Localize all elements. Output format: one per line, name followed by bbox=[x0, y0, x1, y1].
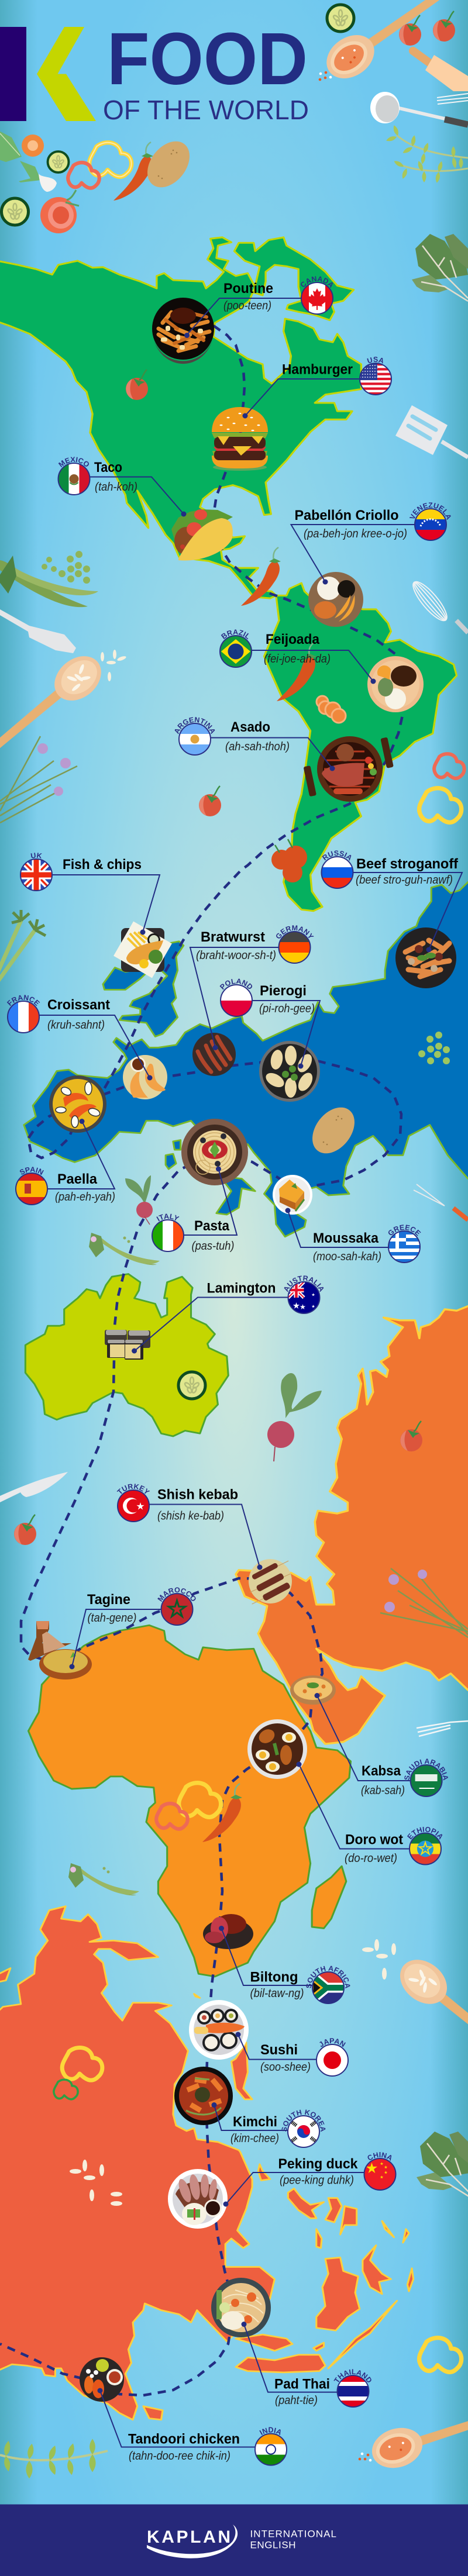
flag: Japan: JAPAN bbox=[318, 2037, 347, 2049]
title: Doro wot bbox=[345, 1832, 403, 1848]
decoration: green peas on Russia bbox=[418, 1032, 450, 1064]
flag: Saudi Arabia: SAUDI ARABIA bbox=[402, 1757, 450, 1781]
dish: paella bbox=[49, 1075, 106, 1133]
flag: Canada bbox=[301, 276, 333, 315]
decoration: table knife bbox=[0, 609, 76, 653]
decoration: ladle bbox=[370, 92, 468, 125]
label: Peking duck bbox=[223, 2151, 395, 2207]
title: Poutine bbox=[223, 281, 273, 296]
decoration: cucumber left bbox=[1, 151, 68, 225]
pronunciation: (pah-eh-yah) bbox=[55, 1191, 115, 1203]
decoration: herb sprigs top right bbox=[386, 125, 468, 183]
pronunciation: (kruh-sahnt) bbox=[47, 1019, 105, 1032]
pronunciation: (soo-shee) bbox=[260, 2061, 311, 2074]
flag: Brazil: BRAZIL bbox=[221, 629, 249, 640]
label: Pasta bbox=[152, 1166, 237, 1253]
label: Sushi bbox=[235, 2032, 348, 2076]
flag: Turkey: TURKEY bbox=[116, 1482, 152, 1496]
decoration: chives left bbox=[0, 736, 77, 823]
decoration: spice specks bbox=[319, 71, 332, 81]
title: Taco bbox=[94, 460, 122, 475]
flag: Venezuela: VENEZUELA bbox=[410, 502, 451, 520]
pronunciation: (beef stro-guh-nawf) bbox=[356, 874, 453, 887]
label: Kabsa bbox=[315, 1693, 450, 1797]
dish: doro wot bbox=[247, 1719, 307, 1779]
title: FOOD: FOOD bbox=[107, 18, 308, 100]
decoration: spice spoon bottom bbox=[367, 2377, 468, 2474]
decoration: peppers right bbox=[419, 754, 464, 822]
pronunciation: (pi-roh-gee) bbox=[259, 1002, 315, 1015]
map: arctic Canada bbox=[235, 237, 354, 320]
flag: Italy: ITALY bbox=[156, 1214, 180, 1221]
pronunciation: (pa-beh-jon kree-o-jo) bbox=[304, 527, 407, 540]
flag: China: CHINA bbox=[366, 2151, 394, 2163]
flag: Argentina: ARGENTINA bbox=[174, 717, 215, 734]
title: Paella bbox=[57, 1171, 98, 1187]
title: Shish kebab bbox=[157, 1487, 238, 1503]
pronunciation: (tah-koh) bbox=[95, 481, 137, 494]
title: Pabellón Criollo bbox=[295, 508, 399, 523]
flag: Australia bbox=[282, 1274, 326, 1313]
title: Pad Thai bbox=[274, 2377, 330, 2392]
map: Asia bbox=[0, 1906, 414, 2420]
dish: poutine bbox=[152, 298, 214, 364]
decoration: carrot slices bbox=[316, 696, 346, 723]
flag: Thailand bbox=[332, 2368, 374, 2407]
decoration: carrot slice bbox=[22, 135, 44, 157]
flag: Mexico: MEXICO bbox=[58, 457, 89, 467]
flag: Greece bbox=[386, 1223, 422, 1263]
dish: beef stroganoff bbox=[395, 927, 456, 988]
title: Kimchi bbox=[233, 2114, 277, 2130]
decoration: small radish bbox=[125, 1175, 153, 1225]
label: Tagine bbox=[69, 1586, 198, 1669]
flag: South Korea: SOUTH KOREA bbox=[280, 2108, 327, 2132]
dish: pasta bbox=[181, 1119, 248, 1185]
flag: Russia: RUSSIA bbox=[322, 850, 351, 861]
dish: hamburger bbox=[212, 407, 268, 471]
decoration: tomato group bbox=[271, 839, 307, 882]
title: Feijoada bbox=[266, 632, 320, 647]
pronunciation: (braht-woor-sh-t) bbox=[196, 949, 276, 962]
pronunciation: (tah-gene) bbox=[88, 1612, 137, 1625]
dish: asado grill bbox=[304, 736, 394, 802]
flag: Brazil bbox=[219, 629, 252, 668]
label: Asado bbox=[174, 717, 335, 771]
decoration: cucumber top bbox=[327, 5, 354, 32]
decoration: tomatoes top right bbox=[399, 11, 455, 46]
title: Hamburger bbox=[282, 361, 353, 378]
title: Pasta bbox=[194, 1218, 230, 1234]
flag: Saudi Arabia bbox=[402, 1757, 450, 1796]
decoration: chives right bbox=[380, 1568, 468, 1637]
dish: shish kebab bbox=[249, 1559, 292, 1605]
flag: Ethiopia bbox=[406, 1825, 445, 1864]
dish: bratwurst bbox=[192, 1033, 236, 1076]
title: Kaplan K logo bbox=[0, 27, 96, 121]
label: Hamburger bbox=[242, 357, 392, 419]
dish: tandoori chicken bbox=[80, 2357, 124, 2402]
title: Beef stroganoff bbox=[356, 856, 459, 872]
flag: Italy bbox=[152, 1212, 184, 1251]
decoration: rice spoon right bbox=[391, 1951, 468, 2103]
flag: Ethiopia: ETHIOPIA bbox=[406, 1825, 445, 1841]
decoration: rolling pin bbox=[413, 51, 468, 91]
decoration: leaves top left bbox=[0, 130, 41, 182]
title: Croissant bbox=[47, 997, 110, 1013]
flag: Germany: GERMANY bbox=[276, 925, 314, 939]
decoration: large radish bbox=[267, 1373, 322, 1461]
flag: Germany bbox=[274, 924, 315, 963]
dish: pabellon criollo bbox=[308, 572, 363, 627]
flag: Poland: POLAND bbox=[220, 979, 253, 989]
decoration: tomato on North America bbox=[126, 370, 148, 400]
dish: fish and chips bbox=[113, 922, 172, 978]
flag: India bbox=[255, 2426, 287, 2465]
footer text: International English bbox=[250, 2529, 336, 2551]
decoration: chard lower bbox=[417, 2132, 468, 2199]
decoration: pea pod bbox=[89, 1233, 160, 1265]
decoration: tomato left bbox=[14, 1515, 36, 1545]
pronunciation: (poo-teen) bbox=[223, 299, 271, 312]
label: Beef stroganoff bbox=[321, 849, 462, 952]
map: North America bbox=[0, 237, 361, 598]
decoration: spatula bbox=[395, 405, 468, 457]
flag: Poland bbox=[218, 977, 254, 1016]
footer text: International English: ENGLISH bbox=[250, 2539, 296, 2551]
title: Sushi bbox=[260, 2042, 298, 2058]
label: Pabellón Criollo bbox=[290, 502, 451, 585]
pronunciation: (shish ke-bab) bbox=[157, 1510, 224, 1523]
label: Doro wot bbox=[296, 1761, 445, 1865]
label: Poutine bbox=[184, 276, 333, 338]
label: Fish and chips bbox=[20, 853, 160, 934]
decoration: chili Brazil bbox=[277, 643, 316, 701]
dish: kimchi bbox=[174, 2067, 233, 2125]
flag: Australia: AUSTRALIA bbox=[282, 1274, 326, 1293]
dish: peking duck bbox=[168, 2169, 228, 2229]
dish: croissant bbox=[123, 1055, 167, 1099]
decoration: tomato near Argentina bbox=[199, 786, 221, 816]
flag: UK bbox=[20, 851, 52, 891]
map: Europe bbox=[24, 882, 468, 1237]
decoration: peas left bbox=[0, 551, 98, 607]
map: South America bbox=[264, 583, 457, 911]
flag: Japan bbox=[316, 2037, 348, 2076]
pronunciation: (pas-tuh) bbox=[192, 1240, 234, 1253]
label: Lamington bbox=[132, 1274, 326, 1353]
pronunciation: (tahn-doo-ree chik-in) bbox=[129, 2450, 230, 2463]
title: Tagine bbox=[87, 1592, 130, 1608]
flag: Spain bbox=[16, 1165, 47, 1205]
decoration: pea pod Africa bbox=[68, 1863, 139, 1895]
decoration: peppers Africa bbox=[156, 1783, 221, 1829]
flag: Morocco: MAROCCO bbox=[156, 1586, 198, 1603]
decoration: garlic bbox=[39, 174, 57, 192]
decoration: fork right bbox=[417, 1721, 468, 1736]
title: Peking duck bbox=[278, 2156, 358, 2172]
title: Bratwurst bbox=[201, 929, 265, 945]
label: Croissant bbox=[5, 994, 153, 1081]
flag: Turkey bbox=[116, 1482, 152, 1522]
pronunciation: (moo-sah-kah) bbox=[313, 1250, 381, 1263]
dish: lamington bbox=[105, 1330, 150, 1360]
decoration: whisk bbox=[408, 577, 468, 633]
decoration: celery bbox=[0, 910, 46, 982]
label: Paella bbox=[16, 1119, 115, 1205]
flag: India: INDIA bbox=[258, 2426, 283, 2437]
dashed route bbox=[0, 326, 404, 2395]
flag: Thailand: THAILAND bbox=[332, 2368, 374, 2385]
pronunciation: (ah-sah-thoh) bbox=[225, 740, 290, 753]
decoration: pepper bottom right bbox=[419, 2338, 462, 2372]
footer text: International English: INTERNATIONAL bbox=[250, 2529, 336, 2539]
dish: feijoada bbox=[367, 656, 424, 712]
flag: USA bbox=[359, 357, 392, 395]
flag: Spain: SPAIN bbox=[20, 1167, 44, 1175]
flag: Canada: CANADA bbox=[301, 276, 333, 288]
decoration: chard top bbox=[412, 234, 468, 301]
footer logo bbox=[147, 2525, 336, 2558]
pronunciation: (pee-king duhk) bbox=[280, 2174, 354, 2187]
map: Australia bbox=[25, 1274, 228, 1436]
pronunciation: (do-ro-wet) bbox=[345, 1852, 397, 1865]
pronunciation: (fei-joe-ah-da) bbox=[264, 653, 331, 665]
decoration: peppers Asia bbox=[54, 2047, 102, 2099]
label: Feijoada bbox=[219, 629, 376, 684]
label: Tandoori chicken bbox=[97, 2388, 287, 2465]
decoration: rice grains left bbox=[101, 650, 127, 681]
dish: tagine bbox=[28, 1621, 92, 1680]
label: Taco bbox=[57, 457, 186, 517]
flag: Mexico bbox=[57, 457, 90, 495]
flag: Morocco bbox=[156, 1586, 198, 1625]
flag: Argentina bbox=[174, 717, 215, 756]
flag: USA: USA bbox=[367, 357, 383, 364]
title: Tandoori chicken bbox=[128, 2432, 240, 2447]
decoration: potato Russia bbox=[304, 1099, 363, 1161]
decoration: cut tomato bbox=[40, 190, 79, 233]
flag: Venezuela bbox=[410, 502, 451, 541]
label: Kimchi bbox=[212, 2102, 327, 2147]
flag: France bbox=[5, 994, 41, 1033]
dish: biltong bbox=[203, 1914, 253, 1949]
decoration: top-right spoon with spices bbox=[318, 0, 468, 87]
title: Fish & chips bbox=[63, 857, 142, 873]
title: Biltong bbox=[250, 1970, 298, 1985]
flag: France: FRANCE bbox=[7, 995, 40, 1006]
flag: South Africa: SOUTH AFRICA bbox=[305, 1964, 352, 1989]
decoration: chili mid bbox=[241, 547, 281, 606]
footer band bbox=[0, 2504, 468, 2576]
title: OF THE WORLD: OF THE WORLD bbox=[103, 95, 309, 125]
map: Madagascar bbox=[312, 1866, 346, 1928]
label: Pierogi bbox=[218, 977, 320, 1069]
pronunciation: (kim-chee) bbox=[230, 2132, 279, 2145]
flag: South Africa bbox=[305, 1964, 352, 2003]
label: Biltong bbox=[219, 1926, 352, 2003]
dish: kabsa bbox=[290, 1675, 336, 1705]
dish: taco bbox=[171, 509, 233, 560]
decoration: potato top bbox=[139, 133, 198, 195]
decoration: herb bottom left bbox=[0, 2439, 108, 2478]
decoration: carving fork bbox=[414, 1184, 468, 1220]
title: Kabsa bbox=[362, 1763, 401, 1779]
flag: Greece: GREECE bbox=[386, 1223, 422, 1237]
title: Moussaka bbox=[313, 1230, 379, 1246]
label: Pad Thai bbox=[241, 2322, 374, 2407]
title: Pierogi bbox=[260, 983, 307, 999]
map: Middle East bbox=[236, 1302, 468, 1744]
decoration: rice grains right bbox=[362, 1939, 396, 1980]
decoration: rice spoon left bbox=[0, 647, 110, 802]
map: Africa bbox=[28, 1625, 350, 1977]
flag: UK: UK bbox=[30, 853, 42, 858]
decoration: knife left bbox=[0, 1472, 68, 1502]
footer logo: KAPLAN bbox=[147, 2527, 230, 2547]
pronunciation: (bil-taw-ng) bbox=[250, 1987, 304, 2000]
title: Asado bbox=[230, 719, 270, 735]
dish: sushi bbox=[189, 2000, 249, 2060]
decoration: chili top bbox=[113, 142, 153, 201]
decoration: spice specks bottom bbox=[359, 2453, 371, 2461]
decoration: tomato on Middle East bbox=[400, 1421, 422, 1451]
label: Bratwurst bbox=[190, 924, 315, 1050]
label: Shish kebab bbox=[116, 1482, 262, 1570]
flag: China bbox=[364, 2151, 395, 2190]
flag: Russia bbox=[321, 849, 354, 888]
dish: moussaka bbox=[273, 1175, 312, 1215]
dish: pad thai bbox=[211, 2278, 271, 2337]
decoration: chili Africa bbox=[202, 1784, 242, 1842]
title: Lamington bbox=[207, 1281, 276, 1296]
label: Moussaka bbox=[285, 1208, 422, 1263]
dish: pierogi bbox=[259, 1041, 320, 1102]
pronunciation: (kab-sah) bbox=[361, 1784, 405, 1797]
pronunciation: (paht-tie) bbox=[275, 2394, 318, 2407]
decoration: fork top bbox=[437, 94, 468, 104]
decoration: cucumber Australia bbox=[178, 1372, 205, 1399]
decoration: peppers top bbox=[68, 143, 132, 188]
decoration: rice grains on Asia bbox=[70, 2160, 122, 2206]
flag: South Korea bbox=[280, 2108, 327, 2147]
